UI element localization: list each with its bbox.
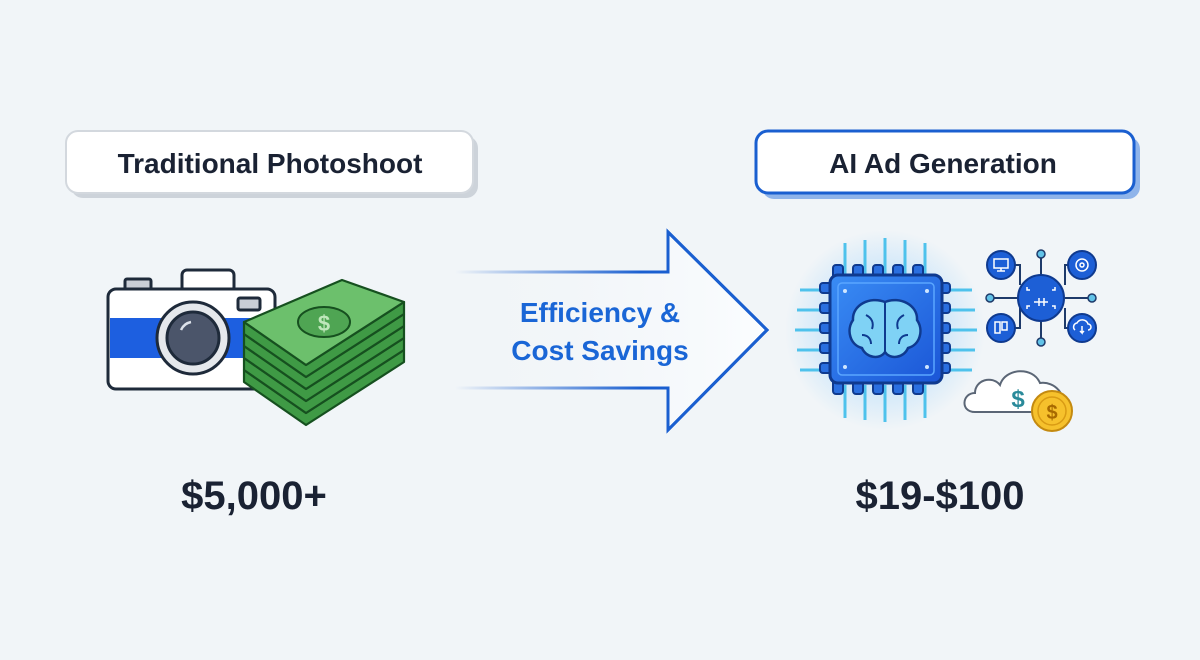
label: AI Ad Generation (756, 131, 1140, 199)
arrow (455, 232, 767, 430)
arrow text: Efficiency & Cost Savings: Cost Savings (511, 335, 689, 366)
icon: cloud with dollar coin (964, 371, 1072, 431)
price: $19-$100: $19-$100 (855, 474, 1025, 518)
icon: cash stack: $ (318, 311, 330, 336)
label: Traditional Photoshoot: Traditional Photoshoot (118, 148, 422, 179)
icon: network hub (986, 250, 1096, 346)
icon: camera (108, 270, 275, 389)
label: Traditional Photoshoot (66, 131, 478, 198)
price: $5,000+: $5,000+ (181, 474, 327, 518)
arrow text: Efficiency & Cost Savings (511, 297, 689, 366)
label: AI Ad Generation: AI Ad Generation (829, 148, 1057, 179)
icon: cloud with dollar coin: $ (1046, 402, 1058, 424)
icon: cash stack (244, 280, 404, 425)
icon: AI chip with brain (785, 230, 985, 430)
icon: cloud with dollar coin: $ (1011, 386, 1025, 413)
arrow text: Efficiency & Cost Savings: Efficiency & (520, 297, 680, 328)
